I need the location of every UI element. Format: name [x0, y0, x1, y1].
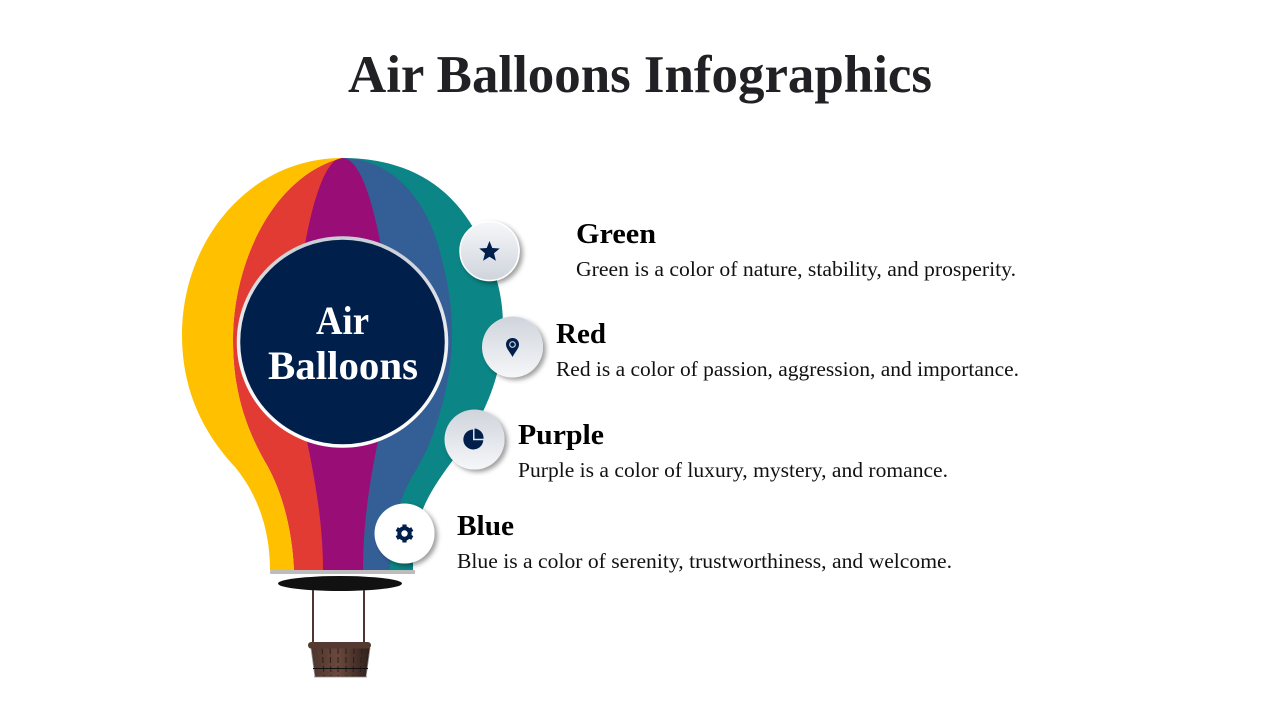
- basket: [308, 642, 371, 677]
- text block: blue: [457, 510, 952, 573]
- text block: green: Green: [576, 218, 656, 250]
- text block: red: [556, 318, 1019, 381]
- title: Air Balloons Infographics: [348, 46, 932, 104]
- ropes: [313, 590, 364, 644]
- text block: red: Red is a color of passion, aggression, and importance.: [556, 357, 1019, 381]
- center label: Balloons: [268, 343, 418, 388]
- text block: blue: Blue is a color of serenity, trustworthiness, and welcome.: [457, 549, 952, 573]
- text block: purple: Purple: [518, 419, 604, 451]
- icon: gear badge: [374, 504, 434, 564]
- text block: green: [576, 218, 1016, 281]
- stripe: blue: [340, 158, 452, 570]
- burner disc: [278, 576, 402, 591]
- stripe: purple: [285, 158, 400, 570]
- stripe: red: [233, 158, 342, 570]
- icon: star badge: [460, 222, 519, 280]
- center label: Air: [316, 298, 369, 343]
- stripe: yellow: [182, 158, 342, 570]
- balloon illustration: [182, 158, 503, 677]
- icon: location pin badge: [482, 316, 543, 378]
- stripe: teal: [340, 158, 503, 570]
- text block: green: Green is a color of nature, stability, and prosperity.: [576, 257, 1016, 281]
- text block: purple: Purple is a color of luxury, mystery, and romance.: [518, 458, 948, 482]
- balloon envelope: [182, 158, 503, 570]
- text block: red: Red: [556, 318, 606, 350]
- balloon base bar: [270, 570, 415, 574]
- text block: purple: [518, 419, 948, 482]
- icon: pie chart badge: [444, 410, 504, 470]
- center circle: [238, 238, 446, 446]
- text block: blue: Blue: [457, 510, 514, 542]
